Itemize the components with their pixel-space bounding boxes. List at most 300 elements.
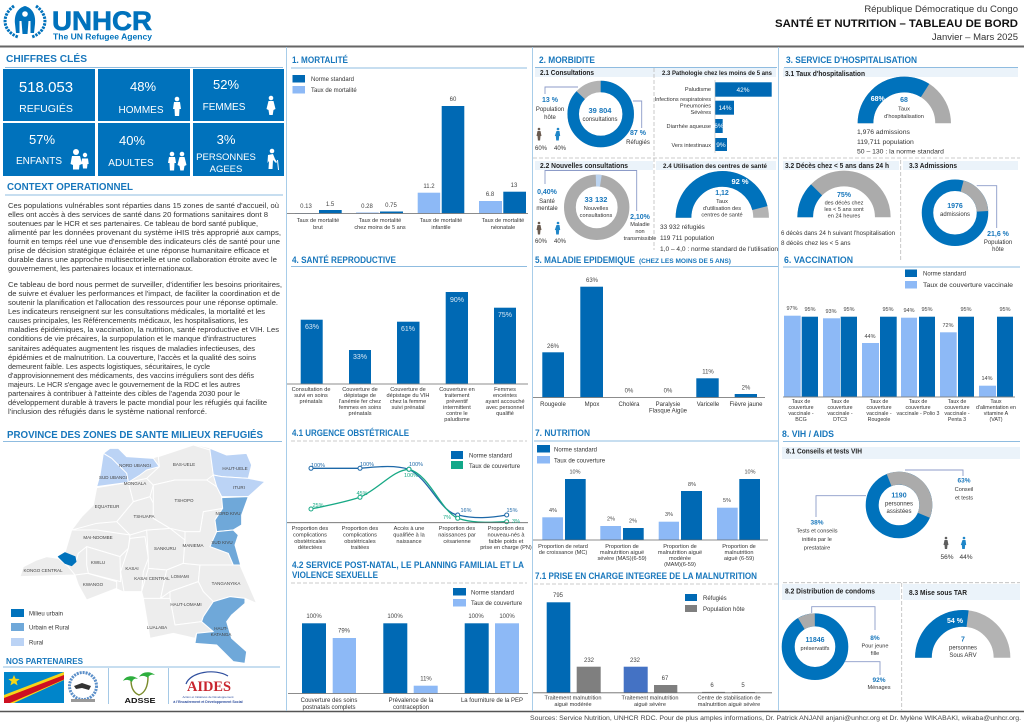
3.3 admissions donut: Population [984,240,1012,246]
panel: chiffres cles: CHIFFRES CLÉS [6,52,87,65]
panel: 5 maladie epidemique: (CHEZ LES MOINS DE 5 ANS) [639,258,731,265]
map province labels: KASAI CENTRAL [134,576,170,581]
8.3 mise sous TAR gauge [903,584,1020,697]
bar chart: 95% [960,307,972,313]
bar chart: 95% [843,307,855,313]
panel: 4 sante reproductive: 4. SANTÉ REPRODUCTIVE [292,255,396,265]
panel: 7.1 prise en charge malnutrition: 7.1 PRISE EN CHARGE INTEGREE DE LA MALNUTRITION [535,571,757,582]
map province labels [23,462,248,637]
text block: paragraph 1: elles ont accès à des services de santé dans 20 formations sanitaires dont 8 [8,212,268,219]
3.1 taux d'hospitalisation gauge: 50 – 130 : la norme standard [857,148,944,156]
2.4 utilisation gauge: 1,12 [715,190,729,197]
2.2 nouvelles consultations donut: 0,40% [537,189,558,196]
panel: 4.1 urgence obstetricale: 4.1 URGENCE OBSTÉTRICALE [292,428,409,438]
panel: nos partenaires [3,656,280,705]
bar chart: Femmes [494,387,516,393]
text block: paragraph 1: Ces populations vulnérables sont réparties dans 15 zones de santé d'accueil, où [8,203,279,210]
map of DRC provinces [20,445,265,663]
panel: 4 sante reproductive [287,255,528,423]
2.4 utilisation gauge: 2.4 Utilisation des centres de santé [663,163,767,170]
map province labels: TANGANYIKA [212,581,240,586]
2.1 consultations donut: 13 % [542,97,559,104]
bar chart: 13 [511,183,518,189]
bar chart: enceintes [493,393,517,399]
panel: carte des provinces [3,428,282,663]
line chart: 100% [404,473,418,479]
bar chart: contre le [446,411,468,417]
bar chart: Proportion de [663,544,697,550]
legend: Taux de couverture [471,601,523,607]
text block: paragraph 1: fournit en temps réel une vue d'ensemble des indicateurs clés de santé pour une [8,239,280,246]
legend: Taux de mortalité [311,88,357,94]
bar chart: couverture [905,405,931,411]
bar chart: 10% [569,470,581,476]
3.2 deces gauge: 75% [837,192,852,199]
text block: paragraph 2: Ce tableau de bord nous permet de surveiller, d'identifier les besoins prioritaires, [8,282,282,289]
bar chart: Couverture des soins [301,698,357,704]
text block: paragraph 2: de suivre et évaluer les performances et l'impact, de faciliter la coordination et de [8,291,280,298]
line chart: 100% [360,462,374,468]
tile: refugies: 518.053 [19,79,73,96]
map province labels: NORD UBANGI [119,463,151,468]
3.2 deces gauge: des décès chez [825,200,864,206]
panel: 1 mortalite [287,55,528,231]
3.2 deces gauge: 3.2 Décès chez < 5 ans dans 24 h [785,163,889,170]
bar chart: 79% [338,628,351,634]
2.4 utilisation gauge [656,161,778,256]
bar chart: malnutrition aiguë sévère [698,702,760,708]
3.2 deces gauge: 8 décès chez les < 5 ans [781,240,850,247]
panel: contexte operationnel [5,182,283,416]
3.1 taux d'hospitalisation gauge: 68% [871,96,885,103]
bar chart: Rougeole [540,402,567,408]
panel: 4.2 service post-natal: VIOLENCE SEXUELLE [292,570,378,580]
legend: Taux de couverture vaccinale [923,283,1014,289]
line chart: obstétricales [294,539,326,545]
map province labels: KATANGA [211,632,231,637]
bar chart: infantile [431,225,451,231]
bar chart: 63% [586,278,599,284]
bar chart: brut [313,225,323,231]
bar chart: 95% [804,307,816,313]
line chart: obstétricales [344,539,376,545]
2.1 consultations donut: consultations [582,117,618,123]
panel: 7 nutrition [533,428,778,568]
tile: enfants [3,123,95,176]
map legend: Rural [29,640,43,646]
panel: 7.1 prise en charge malnutrition [533,571,778,708]
8.2 distribution de condoms donut: Ménages [867,685,891,691]
line chart: naissances par [438,532,476,538]
map province labels: SUD UBANGI [99,475,127,480]
2.4 utilisation gauge: Taux [716,199,728,205]
2.2 nouvelles consultations donut: mentale [536,206,558,212]
bar chart: chez moins de 5 ans [354,225,406,231]
3.3 admissions donut: 1976 [947,203,963,210]
bar chart: 95% [921,307,933,313]
bar chart: Couverture de [390,387,426,393]
line chart: Proportion des [488,526,524,532]
8.2 distribution de condoms donut: fille [871,651,879,657]
bar chart: malnutrition aiguë [658,550,702,556]
bar chart: Taux de [909,399,927,405]
bar chart: 26% [547,344,560,350]
bar chart: Prévalence de la [389,698,434,704]
tile: hommes: HOMMES [118,105,164,116]
line chart: 16% [460,508,472,514]
logo: ministry seal [70,672,96,702]
legend [685,594,745,613]
bar chart: couverture [866,405,892,411]
2.4 utilisation gauge: 33 932 réfugiés [660,224,706,231]
map province labels: SANKURU [154,546,176,551]
8.2 distribution de condoms donut: 8.2 Distribution de condoms [785,588,875,596]
3.3 admissions donut [903,161,1018,253]
legend: Norme standard [311,77,354,83]
2.3 pathologie bar chart: 42% [736,87,750,94]
icons: women and men: 44% [959,554,973,561]
text block: paragraph 2 [8,282,282,416]
bar chart: Paralysie [656,402,681,408]
UNHCR logo: UNHCR [52,6,152,36]
3.3 admissions donut: admissions [940,212,970,218]
bar chart: Consultation de [292,387,330,393]
icons: women and men: 56% [940,554,954,561]
line chart: 3% [512,519,520,525]
map province labels: TSHUAPA [134,514,154,519]
map province labels: TSHOPO [174,498,194,503]
bar chart: Traitement malnutrition [544,696,602,702]
bar chart [287,97,528,231]
bar chart: postnatals complets [302,705,356,711]
bar chart: ayant accouché [485,399,525,405]
map legend: Milieu urbain [29,612,63,618]
line chart: Proportion des [292,526,328,532]
tile: personnes agees: AGEES [210,164,242,175]
tile: adultes [98,123,190,176]
logo: AIDES: AIDES [187,679,231,695]
bar chart: vitamine A [984,411,1009,417]
panel: 4.2 service post-natal [288,560,528,711]
line chart: césarienne [443,539,471,545]
8.2 distribution de condoms donut: 11846 [805,637,825,644]
bar chart: prénatals [348,411,372,417]
bar chart: 5 [741,683,745,689]
bar chart: Taux de mortalité [482,218,524,224]
8.1 conseils et tests donut: Tests et conseils [796,528,838,534]
bar chart: 3% [665,512,673,518]
bar chart: 2% [742,386,751,392]
line chart: 15% [506,508,518,514]
2.2 nouvelles consultations donut: 2,10% [630,214,651,221]
bar chart: d'alimentation en [976,405,1016,411]
bar chart: DTC3 [833,417,847,423]
bar chart: Taux [990,399,1002,405]
map province labels: SUD KIVU [211,540,233,545]
tile: refugies: REFUGIÉS [19,102,73,115]
bar chart: 100% [468,614,484,620]
bar chart [533,470,768,568]
line chart: 25% [312,503,324,509]
line chart: 7% [443,515,451,521]
bar chart: Taux de [948,399,966,405]
bar chart: Flasque Aigüe [649,408,688,414]
bar chart: Fièvre jaune [729,402,763,408]
2.3 pathologie bar chart: 2.3 Pathologie chez les moins de 5 ans [662,70,772,77]
map province labels: NORD KIVU [215,511,241,516]
bar chart: 0% [625,388,634,394]
2.2 nouvelles consultations donut: Santé [539,199,555,205]
panel: 6 vaccination [783,255,1020,423]
bar chart: couverture [827,405,853,411]
bar chart: 97% [786,306,798,312]
panel: 4.1 urgence obstetricale [287,428,532,551]
3.1 taux d'hospitalisation gauge: 119,711 population [857,139,914,146]
line chart: 100% [311,463,325,469]
8.2 distribution de condoms donut: préservatifs [801,646,830,652]
bar chart: 0% [664,388,673,394]
bar chart: dépistage de [344,393,376,399]
legend: Taux de couverture [469,464,521,470]
text block: paragraph 2: causes principales, les Référencements médicaux, les hospitalisations, les [8,318,249,325]
bar chart: préventif [446,399,468,405]
map province labels: KASAI [125,566,139,571]
panel: 4.2 service post-natal: 4.2 SERVICE POST-NATAL, LE PLANNING FAMILIAL ET LA [292,560,524,570]
2.1 consultations donut [535,70,650,152]
8.1 conseils et tests donut: Conseil [955,487,973,493]
line chart: qualifiée à la [393,532,426,538]
text block: paragraph 2: développement durable à travers le pacte mondial pour les réfugiés qui facilite [8,400,267,407]
panel: carte des provinces: PROVINCE DES ZONES DE SANTE MILIEUX REFUGIÉS [7,428,263,441]
legend [453,588,523,607]
text block: paragraph 2: l'inclusion des réfugiés dans le système national renforcé. [8,409,207,416]
bar chart: 60 [450,97,457,103]
3.2 deces gauge [781,161,899,256]
tile: enfants: ENFANTS [16,156,62,167]
bar chart: vaccinale - [866,411,892,417]
8.3 mise sous TAR gauge: personnes [949,646,977,652]
bar chart: (MAM)(6-59) [664,562,696,568]
logo: DRC flag [4,672,64,703]
8.1 conseils et tests donut: 38% [810,520,824,526]
text block: paragraph 2: partenaires à contribuer à l'atteinte des cibles de l'agenda 2030 pour le [8,391,240,398]
panel: 1 mortalite: 1. MORTALITÉ [292,55,348,65]
line chart: faible poids et [489,539,524,545]
bar chart: Mpox [585,402,599,408]
report title: SANTÉ ET NUTRITION – TABLEAU DE BORD [775,17,1018,30]
3.2 deces gauge: en 24 heures [828,214,861,220]
8.2 distribution de condoms donut: 92% [872,677,886,684]
line chart: complications [343,532,377,538]
icons: women and men: 60% [535,239,548,245]
bar chart: contraception [393,705,429,711]
map legend [11,609,69,646]
map province labels: KWILU [91,560,105,565]
2.3 pathologie bar chart: Diarrhée aqueuse [667,124,711,130]
bar chart: 8% [688,482,696,488]
icons: women and men: 40% [554,239,567,245]
3.2 deces gauge: les < 5 ans sont [824,207,864,213]
panel: 5 maladie epidemique: 5. MALADIE EPIDEMIQUE [535,255,635,266]
8.3 mise sous TAR gauge: 8.3 Mise sous TAR [909,590,967,597]
bar chart: 1.5 [326,202,335,208]
bar chart: néonatale [491,225,515,231]
bar chart: suivi prénatal [392,405,424,411]
bar chart: 100% [387,614,403,620]
bar chart: chez la femme [390,399,426,405]
2.3 pathologie bar chart: Infections respiratoires [655,97,711,103]
panel: 2 morbidite [533,55,778,256]
report title: République Démocratique du Congo [864,4,1018,15]
8.1 conseils et tests donut: 8.1 Conseils et tests VIH [786,448,862,456]
8.3 mise sous TAR gauge: 54 % [947,618,964,625]
3.3 admissions donut: 3.3 Admissions [909,163,957,170]
8.2 distribution de condoms donut: Pour jeune [861,644,889,650]
bar chart: modérée [669,556,691,562]
2.4 utilisation gauge: centres de santé [701,212,743,218]
bar chart: Penta 3 [948,417,966,423]
bar chart: 61% [401,326,415,333]
3.1 taux d'hospitalisation gauge: d'hospitalisation [884,114,924,120]
line chart: naissance [396,539,422,545]
bar chart: Traitement malnutrition [622,696,678,702]
panel: 3 service d'hospitalisation: 3. SERVICE D'HOSPITALISATION [786,55,917,66]
text block: paragraph 2: conditions de vie précaires, la surpopulation et le manque d'infrastructures [8,336,257,343]
text block: paragraph 2: épidémies et de malnutrition. La couverture, l'accès et la qualité des soins [8,355,257,362]
bar chart: femmes en soins [339,405,381,411]
2.3 pathologie bar chart: Pneumonies [680,104,711,110]
bar chart: malnutrition [725,550,753,556]
2.1 consultations donut: 87 % [630,130,647,137]
2.2 nouvelles consultations donut: 33 132 [585,195,607,204]
bar chart: 2% [629,518,637,524]
bar chart: 75% [498,312,512,319]
bar chart: Centre de stabilisation de [697,696,761,702]
8.1 conseils et tests donut: 1190 [891,492,907,500]
tile: refugies [3,69,95,121]
legend: Population hôte [703,607,745,613]
bar chart: vaccinale - [827,411,853,417]
line chart: prise en charge (PN) [480,545,532,551]
text block: paragraph 1: alimenté par les données provenant du système iHIS très approprié aux camps, [8,230,281,237]
bar chart: Rougeole [868,417,890,423]
bar chart: Proportion de retard [538,544,588,550]
legend [905,270,1014,289]
text block: paragraph 2: sanitaires adéquates augmentent les risques de maladies infectieuses, des [8,346,256,353]
bar chart: Choléra [618,402,640,408]
bar chart: 67 [662,676,669,682]
2.2 nouvelles consultations donut: transmissible [624,236,656,242]
8.1 conseils et tests donut: personnes [885,502,913,508]
2.2 nouvelles consultations donut: 2.2 Nouvelles consultations [540,161,628,170]
map province labels: MONGALA [124,481,146,486]
line chart: Proportion des [439,526,475,532]
2.4 utilisation gauge: 92 % [731,177,749,186]
bar chart: 0.13 [300,204,312,210]
bar chart: Proportion de [722,544,756,550]
map province labels: EQUATEUR [95,504,120,509]
tile: adultes: 40% [119,133,145,148]
tile: femmes [193,69,284,121]
logo: ADSSE [123,672,156,705]
2.2 nouvelles consultations donut: consultations [580,213,613,219]
panel: 3 service d'hospitalisation [781,55,1020,262]
bar chart: paludisme [444,417,470,423]
line chart: Accès à une [394,526,424,532]
map province labels: KWANGO [83,582,104,587]
legend [451,451,521,470]
bar chart: vaccinale - [788,411,814,417]
bar chart: qualifié [496,411,514,417]
map province labels: HAUT- [214,626,228,631]
bar chart: 5% [723,498,731,504]
bar chart: 0.28 [361,204,373,210]
bar chart: 11% [420,676,432,682]
2.2 nouvelles consultations donut [535,161,656,245]
tile: personnes agees: PERSONNES [196,152,256,163]
text block: paragraph 1 [8,203,281,273]
tile: personnes agees: 3% [217,132,236,147]
3.1 taux d'hospitalisation gauge: 3.1 Taux d'hospitalisation [785,71,865,78]
logo: AIDES: Action et Initiatives de Développement [182,695,234,699]
8.1 conseils et tests donut: initiés par le [802,537,832,543]
bar chart [288,614,528,711]
bar chart: sévère (MAS)(6-59) [597,556,647,562]
bar chart [533,278,765,414]
2.4 utilisation gauge: d'utilisation des [703,206,741,212]
map province labels: MANIEMA [182,543,204,548]
2.2 nouvelles consultations donut: Maladie [630,222,650,228]
bar chart: 232 [584,658,595,664]
bar chart: 10% [744,470,756,476]
icons: women and men [535,128,567,152]
bar chart [287,292,528,423]
panel: 8 VIH / AIDS [779,429,1020,710]
bar chart: aiguë modérée [554,702,592,708]
bar chart: 44% [864,334,876,340]
bar chart: vaccinale - [944,411,970,417]
3.3 admissions donut: hôte [992,247,1004,253]
bar chart: 95% [999,307,1011,313]
2.3 pathologie bar chart: 9% [716,142,726,149]
bar chart: 4% [549,508,557,514]
map province labels: HAUT-LOMAMI [170,602,202,607]
bar chart: avec personnel [486,405,524,411]
bar chart: couverture [788,405,814,411]
map legend: Urbain et Rural [29,626,69,632]
UNHCR logo [5,6,153,42]
bar chart: 14% [981,376,993,382]
tile: hommes [98,69,190,121]
bar chart: 11.2 [423,184,435,190]
logo: AIDES [173,672,243,704]
line chart: nouveau-nés à [487,532,525,538]
legend: Norme standard [471,590,514,596]
bar chart: 2% [607,516,615,522]
2.3 pathologie bar chart: 14% [718,105,732,112]
3.1 taux d'hospitalisation gauge: 1,976 admissions [857,129,910,136]
UNHCR logo: The UN Refugee Agency [53,32,153,42]
bar chart: 11% [702,370,714,376]
3.3 admissions donut: 21,6 % [987,231,1010,238]
bar chart: La fourniture de la PEP [461,698,523,704]
3.1 taux d'hospitalisation gauge: 68 [900,97,908,104]
text block: paragraph 2: soutenir la planification et l'allocation des ressources pour une réponse optimale. [8,300,278,307]
map province labels: KONGO CENTRAL [23,568,63,573]
map province labels: HAUT-UELE [222,466,248,471]
text block: paragraph 1: prise de décision stratégique éclairée et une réponse humanitaire efficace et [8,248,269,255]
8.3 mise sous TAR gauge: 7 [961,636,965,644]
